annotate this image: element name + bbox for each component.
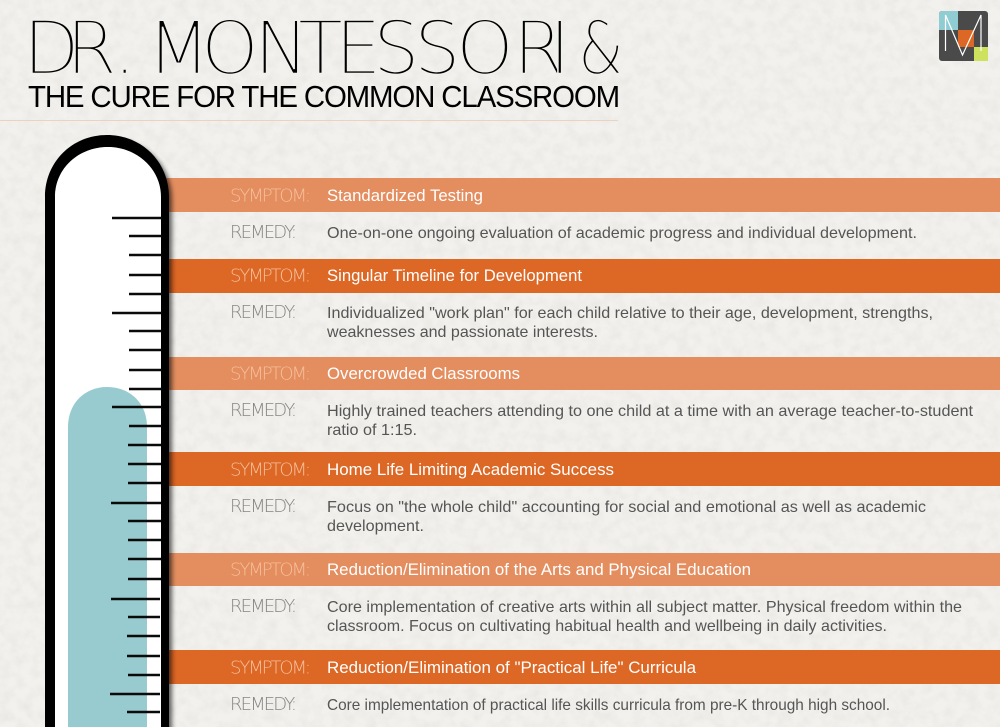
title line two: THE CURE FOR THE COMMON CLASSROOM <box>28 80 619 114</box>
title <box>23 5 624 114</box>
row 5 remedy: classroom. Focus on cultivating habitual health and wellbeing in daily activities. <box>327 618 887 635</box>
row 1 remedy <box>230 222 917 243</box>
row 4 symptom band <box>165 452 1000 486</box>
title ampersand: & <box>578 5 624 91</box>
row 1 symptom band <box>165 178 1000 212</box>
title line one: DR. MONTESSORI <box>23 6 571 92</box>
row 1 symptom band: Standardized Testing <box>327 187 483 205</box>
row 5 symptom band: SYMPTOM: <box>230 560 311 580</box>
thermometer <box>45 135 172 727</box>
row 6 symptom band: Reduction/Elimination of "Practical Life" Curricula <box>327 659 697 677</box>
row 4 remedy: Focus on "the whole child" accounting for social and emotional as well as academic <box>327 499 926 516</box>
row 5 symptom band <box>165 553 1000 586</box>
row 3 symptom band: Overcrowded Classrooms <box>327 365 520 383</box>
row 2 remedy: weaknesses and passionate interests. <box>326 324 598 341</box>
row 6 remedy: Core implementation of practical life skills curricula from pre-K through high school. <box>327 697 890 714</box>
thermometer glass <box>55 147 161 727</box>
row 6 symptom band <box>165 650 1000 684</box>
row 3 symptom band <box>165 357 1000 390</box>
row 2 remedy: Individualized "work plan" for each child relative to their age, development, strengths, <box>327 305 933 322</box>
row 2 remedy: REMEDY: <box>230 302 297 323</box>
row 2 symptom band: SYMPTOM: <box>230 266 311 286</box>
row 2 remedy <box>230 302 933 341</box>
row 4 remedy: development. <box>327 518 424 535</box>
row 5 remedy <box>230 596 962 635</box>
row 5 symptom band: Reduction/Elimination of the Arts and Physical Education <box>327 561 751 579</box>
row 5 remedy: REMEDY: <box>230 596 297 617</box>
row 6 remedy <box>230 694 890 715</box>
row 5 remedy: Core implementation of creative arts within all subject matter. Physical freedom within the <box>327 599 962 616</box>
row 3 remedy <box>230 400 974 439</box>
row 6 symptom band: SYMPTOM: <box>230 658 311 678</box>
scale ticks <box>110 218 162 712</box>
row 3 symptom band: SYMPTOM: <box>230 364 311 384</box>
row 4 remedy: REMEDY: <box>230 496 297 517</box>
logo <box>939 11 988 61</box>
row 3 remedy: Highly trained teachers attending to one child at a time with an average teacher-to-student <box>327 403 974 420</box>
liquid level <box>68 387 147 727</box>
row 6 remedy: REMEDY: <box>230 694 297 715</box>
row 3 remedy: ratio of 1:15. <box>327 422 417 439</box>
row 1 remedy: REMEDY: <box>230 222 297 243</box>
row 4 symptom band: SYMPTOM: <box>230 460 311 480</box>
row 3 remedy: REMEDY: <box>230 400 297 421</box>
thermometer outline <box>45 135 169 727</box>
row 4 remedy <box>230 496 926 535</box>
row 1 symptom band: SYMPTOM: <box>230 186 311 206</box>
row 2 symptom band: Singular Timeline for Development <box>327 267 582 285</box>
row 2 symptom band <box>165 259 1000 293</box>
row 1 remedy: One-on-one ongoing evaluation of academic progress and individual development. <box>327 225 917 242</box>
panel: symptom and remedy rows <box>165 178 1000 715</box>
row 4 symptom band: Home Life Limiting Academic Success <box>327 461 614 479</box>
